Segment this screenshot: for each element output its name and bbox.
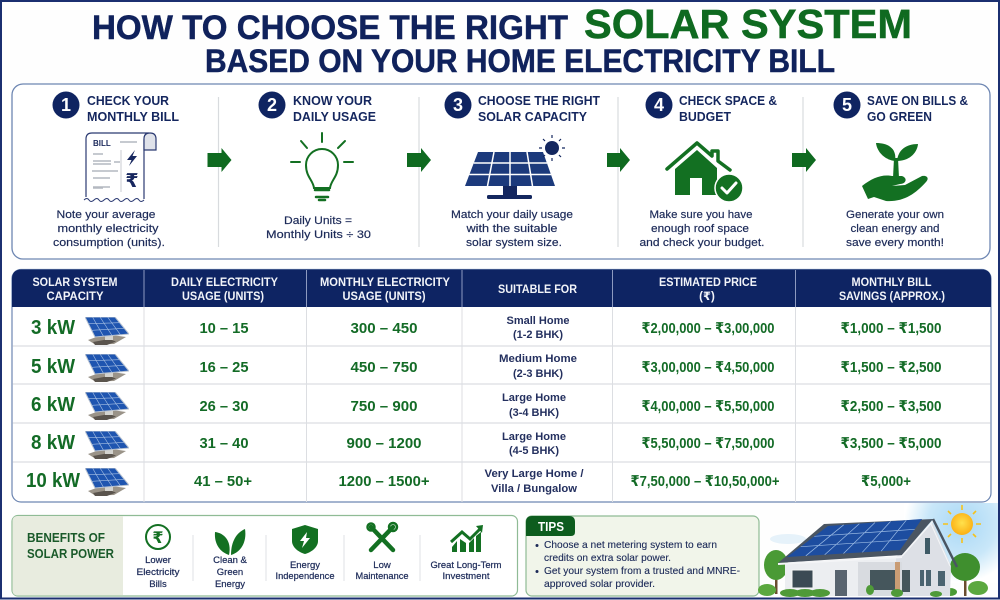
row: 6 kW: 750 – 900 — [350, 398, 418, 415]
row: 8 kW: 8 kW — [31, 432, 75, 454]
step 1: check your monthly bill: CHECK YOUR — [87, 94, 169, 108]
step 1 text: Note your average — [56, 209, 156, 221]
benefit: great long-term investment: Great Long-Term — [430, 560, 502, 571]
step 2: know your daily usage: DAILY USAGE — [293, 110, 376, 124]
title: SOLAR SYSTEM — [584, 1, 912, 47]
benefit: low maintenance — [356, 523, 408, 582]
icon: light bulb — [291, 133, 353, 200]
row: 6 kW — [31, 392, 942, 420]
row: 5 kW: ₹3,00,000 – ₹4,50,000 — [642, 359, 774, 376]
tips list: Get your system from a trusted and MNRE- — [544, 565, 740, 577]
row: 10 kW: Very Large Home / — [484, 468, 584, 480]
row: 3 kW: 300 – 450 — [350, 320, 418, 337]
icon: bill: BILL — [93, 139, 111, 148]
icon: bill — [84, 133, 156, 202]
icon: plant in hand — [862, 143, 928, 201]
benefit: low maintenance: Maintenance — [356, 571, 408, 582]
row: 5 kW: Medium Home — [499, 353, 577, 365]
row: 8 kW: ₹3,500 – ₹5,000 — [840, 435, 942, 452]
benefits heading — [27, 531, 114, 561]
row: 6 kW: Large Home — [502, 392, 566, 404]
step 1 text: consumption (units). — [53, 237, 165, 249]
title: HOW TO CHOOSE THE RIGHT — [92, 9, 568, 47]
step 5 text — [846, 209, 944, 249]
trees — [758, 550, 988, 596]
step 1: check your monthly bill — [52, 92, 179, 249]
row: 10 kW: 1200 – 1500+ — [338, 473, 430, 490]
row: 3 kW: 3 kW — [31, 317, 75, 339]
row: 10 kW: 10 kW — [26, 470, 80, 492]
sun — [943, 505, 981, 543]
table: solar system sizes — [12, 270, 991, 502]
benefit: great long-term investment — [430, 525, 502, 582]
step 5 text: clean energy and — [850, 223, 940, 235]
benefit: clean and green energy — [213, 529, 248, 590]
row: 3 kW: ₹2,00,000 – ₹3,00,000 — [642, 320, 774, 337]
step 5: save on bills and go green: 5 — [842, 95, 852, 115]
step 2 text — [266, 215, 371, 241]
step 5: save on bills and go green: SAVE ON BILLS & — [867, 94, 968, 108]
row: 6 kW: 6 kW — [31, 394, 75, 416]
table header: USAGE (UNITS) — [342, 291, 426, 303]
row: 5 kW: 450 – 750 — [350, 359, 418, 376]
arrow — [607, 148, 630, 172]
tips list — [536, 539, 740, 590]
benefit: lower electricity bills: ₹ — [152, 530, 164, 547]
table header: MONTHLY BILL — [852, 277, 932, 289]
row: 3 kW — [31, 315, 942, 345]
row: 8 kW: 900 – 1200 — [346, 435, 422, 452]
step 4: check space and budget: 4 — [654, 95, 664, 115]
row: 8 kW — [31, 431, 942, 459]
row: 10 kW: Villa / Bungalow — [491, 483, 577, 495]
table header: SUITABLE FOR — [498, 284, 578, 296]
benefit: energy independence — [276, 525, 334, 582]
benefit: low maintenance: Low — [373, 560, 391, 571]
step 1 text — [53, 209, 165, 249]
step 1: check your monthly bill: MONTHLY BILL — [87, 110, 179, 124]
icon: solar panel with sun — [465, 135, 565, 199]
step 3: choose the right solar capacity: 3 — [453, 95, 463, 115]
step 3 text: with the suitable — [465, 223, 558, 235]
panel: tips — [526, 516, 759, 596]
step 4: check space and budget — [640, 92, 777, 249]
benefits heading: SOLAR POWER — [27, 547, 114, 561]
windows and door — [792, 538, 945, 596]
step 3: choose the right solar capacity — [444, 92, 600, 249]
table header — [12, 270, 991, 307]
arrow — [208, 148, 232, 172]
row: 10 kW — [26, 468, 911, 496]
step 5 text: save every month! — [846, 237, 944, 249]
row: 6 kW: ₹4,00,000 – ₹5,50,000 — [642, 398, 774, 415]
row: 3 kW: ₹1,000 – ₹1,500 — [840, 320, 942, 337]
row: 8 kW: Large Home — [502, 431, 566, 443]
row: 8 kW: 31 – 40 — [200, 435, 248, 452]
row: 5 kW: ₹1,500 – ₹2,500 — [840, 359, 942, 376]
benefit: energy independence: Energy — [290, 560, 320, 571]
step 5 text: Generate your own — [846, 209, 944, 221]
step 4 text — [640, 209, 764, 249]
step 2: know your daily usage: KNOW YOUR — [293, 94, 372, 108]
roof — [778, 519, 933, 563]
row: 6 kW: ₹2,500 – ₹3,500 — [840, 398, 942, 415]
benefit: clean and green energy: Clean & — [213, 555, 248, 566]
tips badge: TIPS — [538, 519, 564, 534]
step 2 text: Daily Units = — [284, 215, 352, 227]
table header: ESTIMATED PRICE — [659, 277, 757, 289]
panel: five steps — [12, 84, 990, 259]
row: 5 kW — [31, 353, 942, 382]
step 3: choose the right solar capacity: SOLAR CAPACITY — [478, 110, 588, 124]
table header: MONTHLY ELECTRICITY — [320, 277, 450, 289]
benefit: lower electricity bills — [136, 525, 180, 590]
tips list: Choose a net metering system to earn — [544, 539, 717, 551]
row: 8 kW: (4-5 BHK) — [509, 445, 559, 457]
table header: SAVINGS (APPROX.) — [839, 291, 945, 303]
step 4: check space and budget: CHECK SPACE & — [679, 94, 777, 108]
step 2: know your daily usage — [258, 92, 376, 241]
benefit: lower electricity bills: Electricity — [136, 567, 180, 578]
tips badge — [526, 516, 575, 536]
row: 3 kW: 10 – 15 — [200, 320, 248, 337]
step 5: save on bills and go green: GO GREEN — [867, 110, 932, 124]
row: 5 kW: 16 – 25 — [200, 359, 248, 376]
step 1: check your monthly bill: 1 — [61, 95, 71, 115]
step 2: know your daily usage: 2 — [267, 95, 277, 115]
row: 6 kW: (3-4 BHK) — [509, 407, 559, 419]
icon: house with check — [667, 143, 743, 202]
tips list: credits on extra solar power. — [544, 552, 671, 564]
table header: DAILY ELECTRICITY — [171, 277, 278, 289]
step 3 text: solar system size. — [466, 237, 562, 249]
table header: SOLAR SYSTEM — [32, 277, 118, 289]
icon: bill: ₹ — [125, 171, 139, 192]
step 4 text: enough roof space — [651, 223, 749, 235]
arrow — [792, 148, 816, 172]
step 2 text: Monthly Units ÷ 30 — [266, 229, 371, 241]
table header: USAGE (UNITS) — [182, 291, 264, 303]
step 3 text: Match your daily usage — [451, 209, 573, 221]
benefit: lower electricity bills: Bills — [149, 579, 167, 590]
row: 5 kW: 5 kW — [31, 356, 75, 378]
step 4 text: and check your budget. — [640, 237, 764, 249]
row: 10 kW: ₹5,000+ — [861, 473, 911, 490]
row: 6 kW: 26 – 30 — [200, 398, 248, 415]
step 3: choose the right solar capacity: CHOOSE THE RIGHT — [478, 94, 600, 108]
panel: benefits of solar power — [12, 516, 518, 596]
row: 3 kW: Small Home — [506, 315, 570, 327]
benefit: clean and green energy: Green — [217, 567, 243, 578]
step 5: save on bills and go green — [834, 92, 968, 249]
solar panels — [787, 519, 922, 557]
bushes — [780, 585, 942, 597]
row: 10 kW: ₹7,50,000 – ₹10,50,000+ — [630, 473, 780, 490]
step 4 text: Make sure you have — [650, 209, 752, 221]
row: 8 kW: ₹5,50,000 – ₹7,50,000 — [642, 435, 774, 452]
benefit: great long-term investment: Investment — [442, 571, 490, 582]
step 3 text — [451, 209, 573, 249]
title: BASED ON YOUR HOME ELECTRICITY BILL — [205, 43, 835, 79]
illustration: house with solar roof and sun — [758, 503, 998, 597]
title — [92, 1, 912, 79]
benefit: energy independence: Independence — [276, 571, 334, 582]
benefit: clean and green energy: Energy — [215, 579, 245, 590]
row: 3 kW: (1-2 BHK) — [513, 329, 563, 341]
tips list: approved solar provider. — [544, 578, 655, 590]
row: 5 kW: (2-3 BHK) — [513, 368, 563, 380]
house walls — [785, 557, 902, 596]
table header: (₹) — [699, 291, 715, 303]
step 1 text: monthly electricity — [58, 223, 159, 235]
step 4: check space and budget: BUDGET — [679, 110, 731, 124]
benefit: lower electricity bills: Lower — [145, 555, 171, 566]
benefits heading: BENEFITS OF — [27, 531, 105, 545]
row: 10 kW: 41 – 50+ — [194, 473, 252, 490]
table header: CAPACITY — [46, 291, 104, 303]
arrow — [407, 148, 431, 172]
